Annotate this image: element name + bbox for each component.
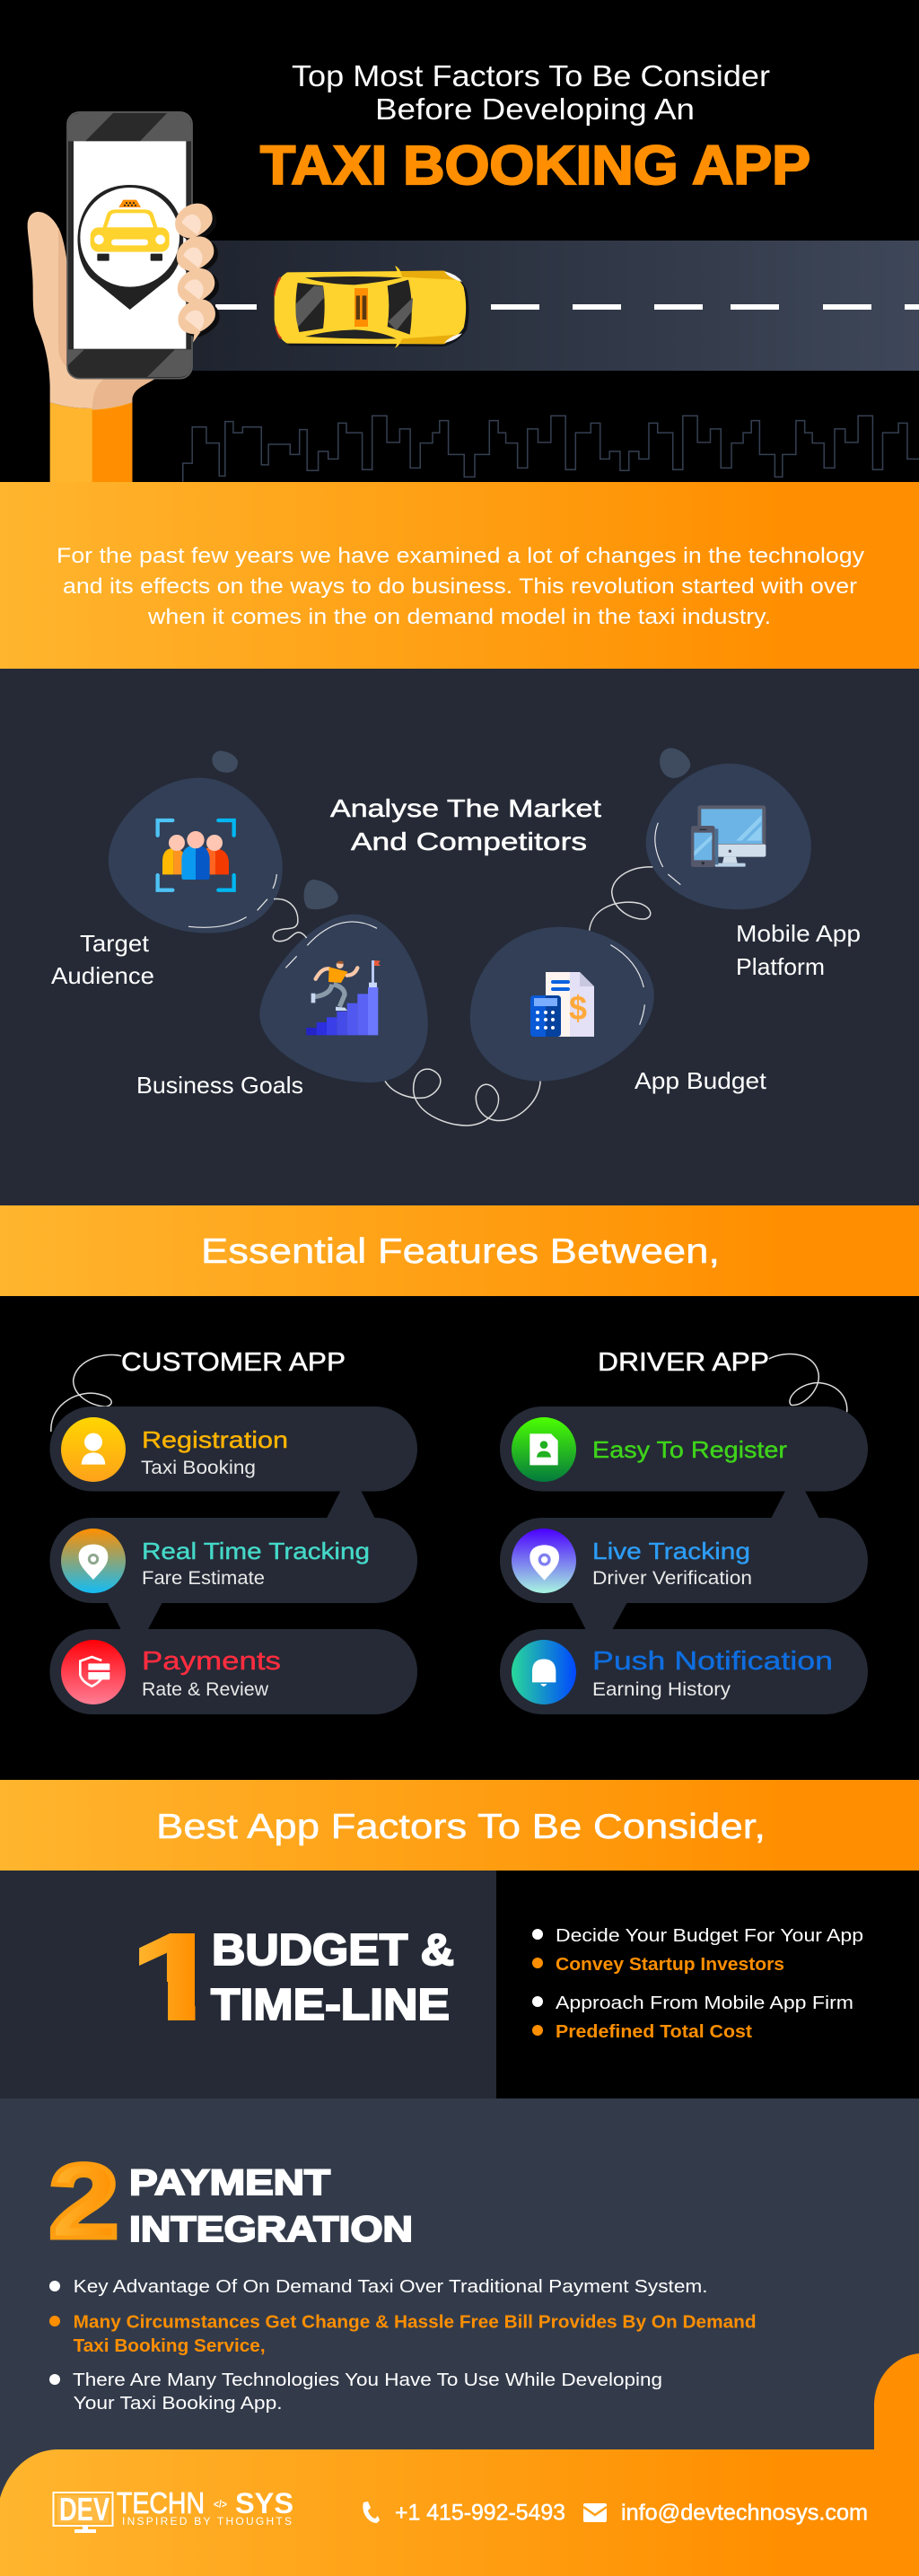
squiggle left	[188, 874, 377, 968]
item: push notification: Earning History	[592, 1679, 731, 1700]
bullet list: Predefined Total Cost	[556, 2022, 752, 2042]
bullet list: Convey Startup Investors	[556, 1955, 784, 1975]
heading: TIME-LINE	[211, 1981, 450, 2029]
label: mobile app platform	[736, 920, 861, 980]
item: easy to register: Easy To Register	[592, 1436, 787, 1463]
icon: business goals runner	[306, 960, 381, 1035]
icon: taxi car top view	[274, 266, 468, 348]
icon: target audience	[158, 820, 234, 890]
heading: driver app: DRIVER APP	[598, 1348, 769, 1377]
squiggle right	[590, 823, 680, 1025]
heading: Essential Features Between,	[201, 1232, 720, 1271]
title	[260, 59, 810, 196]
email: info@devtechnosys.com	[621, 2501, 868, 2526]
panel: intro	[0, 482, 919, 669]
item: live tracking: Driver Verification	[592, 1568, 752, 1589]
icon: hand holding phone	[28, 112, 220, 482]
fingers	[175, 204, 220, 343]
item: registration: Registration	[142, 1426, 288, 1453]
heading: And Competitors	[351, 828, 587, 855]
logo: </>	[214, 2498, 227, 2510]
phone number: +1 415-992-5493	[395, 2501, 565, 2526]
bullet list: Your Taxi Booking App.	[74, 2394, 283, 2414]
customer feature list	[50, 1406, 417, 1714]
item: payments: Rate & Review	[142, 1679, 269, 1700]
road	[179, 241, 919, 371]
blobs	[109, 748, 811, 1126]
intro text: when it comes in the on demand model in the taxi industry.	[147, 605, 771, 629]
phone	[67, 112, 192, 379]
logo: SYS	[235, 2487, 293, 2519]
panel: essential features heading	[0, 1205, 919, 1296]
label: app budget: App Budget	[635, 1067, 767, 1094]
logo: DEV	[59, 2491, 109, 2528]
panel: features	[0, 1296, 919, 1780]
label: business goals: Business Goals	[136, 1072, 303, 1099]
bullet list: Approach From Mobile App Firm	[556, 1993, 853, 2013]
map pin with taxi	[77, 185, 183, 310]
bullet list	[49, 2277, 757, 2414]
bullet list: Many Circumstances Get Change & Hassle Free Bill Provides By On Demand	[74, 2312, 757, 2332]
panel: best app factors heading	[0, 1780, 919, 1871]
heading: PAYMENT	[129, 2163, 330, 2203]
logo	[54, 2486, 293, 2533]
sleeve	[50, 402, 132, 482]
heading: BUDGET &	[212, 1926, 454, 1975]
item: real time tracking: Real Time Tracking	[142, 1538, 370, 1564]
heading	[330, 794, 601, 855]
intro text: For the past few years we have examined a lot of changes in the technology	[57, 544, 864, 568]
heading: Analyse The Market	[330, 794, 601, 822]
item: payments: Payments	[142, 1647, 281, 1676]
number 1: 1	[130, 1909, 223, 2047]
label: target audience: Target	[80, 930, 150, 957]
footer	[0, 2353, 919, 2576]
item: real time tracking: Fare Estimate	[142, 1568, 265, 1589]
intro text	[57, 544, 864, 629]
item: push notification	[500, 1629, 868, 1714]
intro text: and its effects on the ways to do business. This revolution started with over	[63, 574, 857, 599]
bullet list: Decide Your Budget For Your App	[556, 1926, 863, 1946]
panel: header	[0, 0, 919, 482]
panel: payment integration	[0, 2098, 919, 2576]
bullet list: Key Advantage Of On Demand Taxi Over Traditional Payment System.	[74, 2277, 708, 2297]
item: live tracking: Live Tracking	[592, 1538, 750, 1564]
label: target audience	[51, 930, 154, 989]
icon: app budget	[530, 972, 594, 1037]
heading	[129, 2163, 413, 2249]
palm and thumb	[28, 212, 155, 410]
icon: phone	[363, 2502, 380, 2523]
heading: Best App Factors To Be Consider,	[156, 1808, 766, 1846]
bullet list	[532, 1926, 863, 2042]
item: payments	[50, 1629, 417, 1714]
item: registration	[50, 1406, 417, 1492]
title: TAXI BOOKING APP	[260, 135, 810, 196]
logo: TECHN	[117, 2486, 205, 2519]
item: push notification: Push Notification	[592, 1647, 833, 1676]
bullet list: There Are Many Technologies You Have To Use While Developing	[73, 2370, 662, 2390]
title: Top Most Factors To Be Consider	[292, 59, 770, 92]
item: easy to register	[500, 1406, 868, 1492]
skyline	[183, 416, 919, 482]
label: mobile app platform: Platform	[736, 953, 825, 980]
icon: mail	[583, 2503, 607, 2522]
icon: mobile app platform devices	[691, 805, 766, 867]
heading: INTEGRATION	[129, 2210, 413, 2249]
label: target audience: Audience	[51, 962, 154, 989]
icon: app budget: $	[569, 990, 587, 1028]
panel: analyse the market	[0, 669, 919, 1205]
heading	[211, 1926, 454, 2029]
logo: INSPIRED BY THOUGHTS	[122, 2515, 292, 2528]
item: real time tracking	[50, 1518, 417, 1603]
item: live tracking	[500, 1518, 868, 1603]
panel: budget and timeline	[0, 1871, 919, 2098]
label: mobile app platform: Mobile App	[736, 920, 861, 947]
heading: customer app: CUSTOMER APP	[121, 1348, 346, 1377]
bullet list: Taxi Booking Service,	[74, 2336, 266, 2356]
title: Before Developing An	[375, 92, 695, 126]
number 2: 2	[48, 2142, 119, 2261]
driver feature list	[500, 1406, 868, 1714]
squiggles	[51, 1354, 847, 1432]
item: registration: Taxi Booking	[141, 1458, 256, 1478]
